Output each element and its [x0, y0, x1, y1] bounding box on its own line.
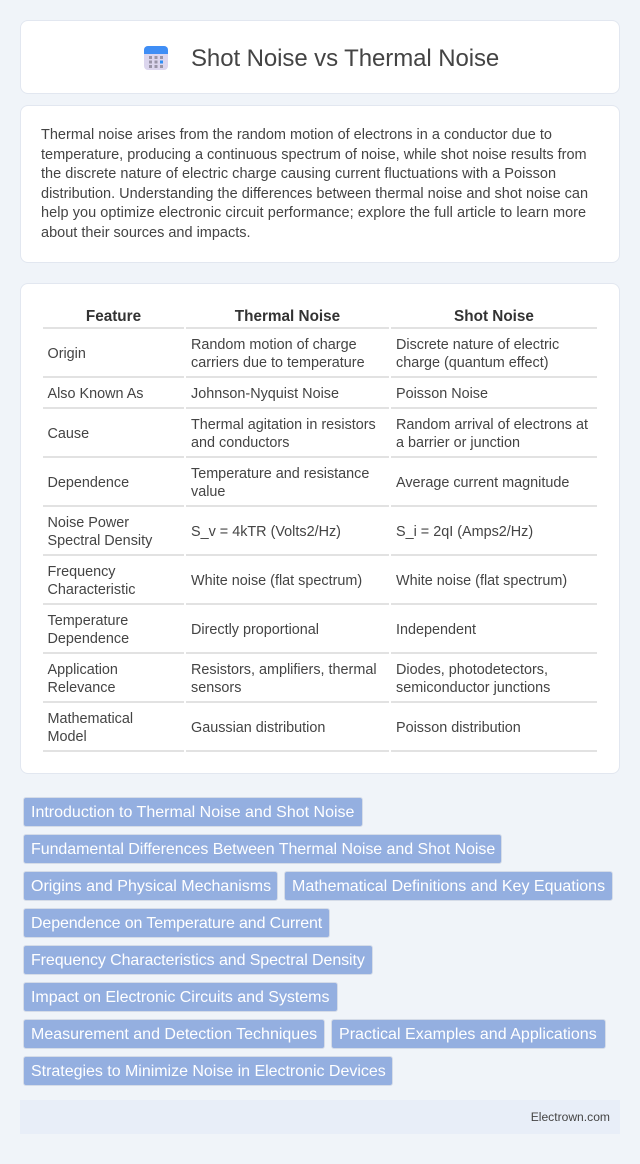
table: Independent: [396, 622, 476, 638]
footer: [20, 1100, 620, 1134]
tag: [23, 1056, 393, 1086]
table: Feature: [86, 308, 141, 324]
intro text: help you optimize electronic circuit performance; explore the full article to learn more: [41, 205, 586, 221]
table: Gaussian distribution: [191, 720, 325, 736]
tag: Impact on Electronic Circuits and Systems: [31, 989, 329, 1006]
table: Johnson-Nyquist Noise: [191, 386, 339, 402]
tag: [23, 834, 502, 864]
table: Characteristic: [48, 582, 135, 598]
table: Cause: [48, 426, 89, 442]
intro text: the discrete nature of electric charge causing current fluctuations with a Poisson: [41, 166, 556, 182]
tag: Frequency Characteristics and Spectral Density: [31, 952, 365, 969]
tag: [23, 1019, 325, 1049]
table: Shot Noise: [454, 308, 534, 324]
table: Also Known As: [48, 386, 144, 402]
table: Relevance: [48, 680, 116, 696]
tag: Mathematical Definitions and Key Equations: [292, 878, 605, 895]
tag: Practical Examples and Applications: [339, 1026, 597, 1043]
table: Poisson Noise: [396, 386, 488, 402]
intro text: Thermal noise arises from the random motion of electrons in a conductor due to: [41, 127, 552, 143]
table: carriers due to temperature: [191, 355, 365, 371]
table: Dependence: [48, 631, 129, 647]
tag: [23, 871, 278, 901]
tag: [23, 982, 338, 1012]
table: Spectral Density: [48, 533, 152, 549]
tag: Strategies to Minimize Noise in Electronic Devices: [31, 1063, 386, 1080]
table: Application: [48, 662, 118, 678]
tag: Origins and Physical Mechanisms: [31, 878, 271, 895]
table: Temperature and resistance: [191, 466, 369, 482]
table: Diodes, photodetectors,: [396, 662, 548, 678]
intro text: [41, 127, 588, 240]
footer credit: Electrown.com: [531, 1110, 610, 1124]
table: Mathematical: [48, 711, 133, 727]
tag: [331, 1019, 606, 1049]
table: Directly proportional: [191, 622, 319, 638]
table: Average current magnitude: [396, 475, 569, 491]
table: Model: [48, 729, 87, 745]
header panel: [20, 20, 620, 94]
tag: Measurement and Detection Techniques: [31, 1026, 317, 1043]
table: Thermal agitation in resistors: [191, 417, 376, 433]
table: White noise (flat spectrum): [191, 573, 362, 589]
table: Resistors, amplifiers, thermal: [191, 662, 377, 678]
table: charge (quantum effect): [396, 355, 549, 371]
intro text: about their sources and impacts.: [41, 224, 251, 240]
table: Noise Power: [48, 515, 129, 531]
tag: Introduction to Thermal Noise and Shot Noise: [31, 804, 354, 821]
comparison table panel: [20, 283, 620, 774]
table: value: [191, 484, 225, 500]
table: a barrier or junction: [396, 435, 520, 451]
intro panel: [20, 105, 620, 263]
table: and conductors: [191, 435, 289, 451]
tag: Dependence on Temperature and Current: [31, 915, 322, 932]
table: [43, 308, 597, 752]
table: Poisson distribution: [396, 720, 521, 736]
intro text: temperature, producing a continuous spectrum of noise, while shot noise results from: [41, 146, 587, 162]
table: Random motion of charge: [191, 337, 357, 353]
table: Temperature: [48, 613, 128, 629]
table: semiconductor junctions: [396, 680, 550, 696]
table: Origin: [48, 346, 86, 362]
tag: [23, 908, 330, 938]
tag: [284, 871, 613, 901]
table: Random arrival of electrons at: [396, 417, 588, 433]
table: White noise (flat spectrum): [396, 573, 567, 589]
icon: calendar: [144, 46, 168, 70]
tag: [23, 797, 363, 827]
tag: [23, 945, 373, 975]
intro text: distribution. Understanding the differences between thermal noise and shot noise can: [41, 186, 588, 202]
table: Thermal Noise: [235, 308, 340, 324]
table: sensors: [191, 680, 241, 696]
table: S_v = 4kTR (Volts2/Hz): [191, 524, 341, 540]
table: Discrete nature of electric: [396, 337, 559, 353]
table: Frequency: [48, 564, 116, 580]
topic tags: [23, 797, 613, 1086]
title: Shot Noise vs Thermal Noise: [191, 45, 499, 72]
table: Dependence: [48, 475, 129, 491]
table: S_i = 2qI (Amps2/Hz): [396, 524, 533, 540]
tag: Fundamental Differences Between Thermal Noise and Shot Noise: [31, 841, 495, 858]
